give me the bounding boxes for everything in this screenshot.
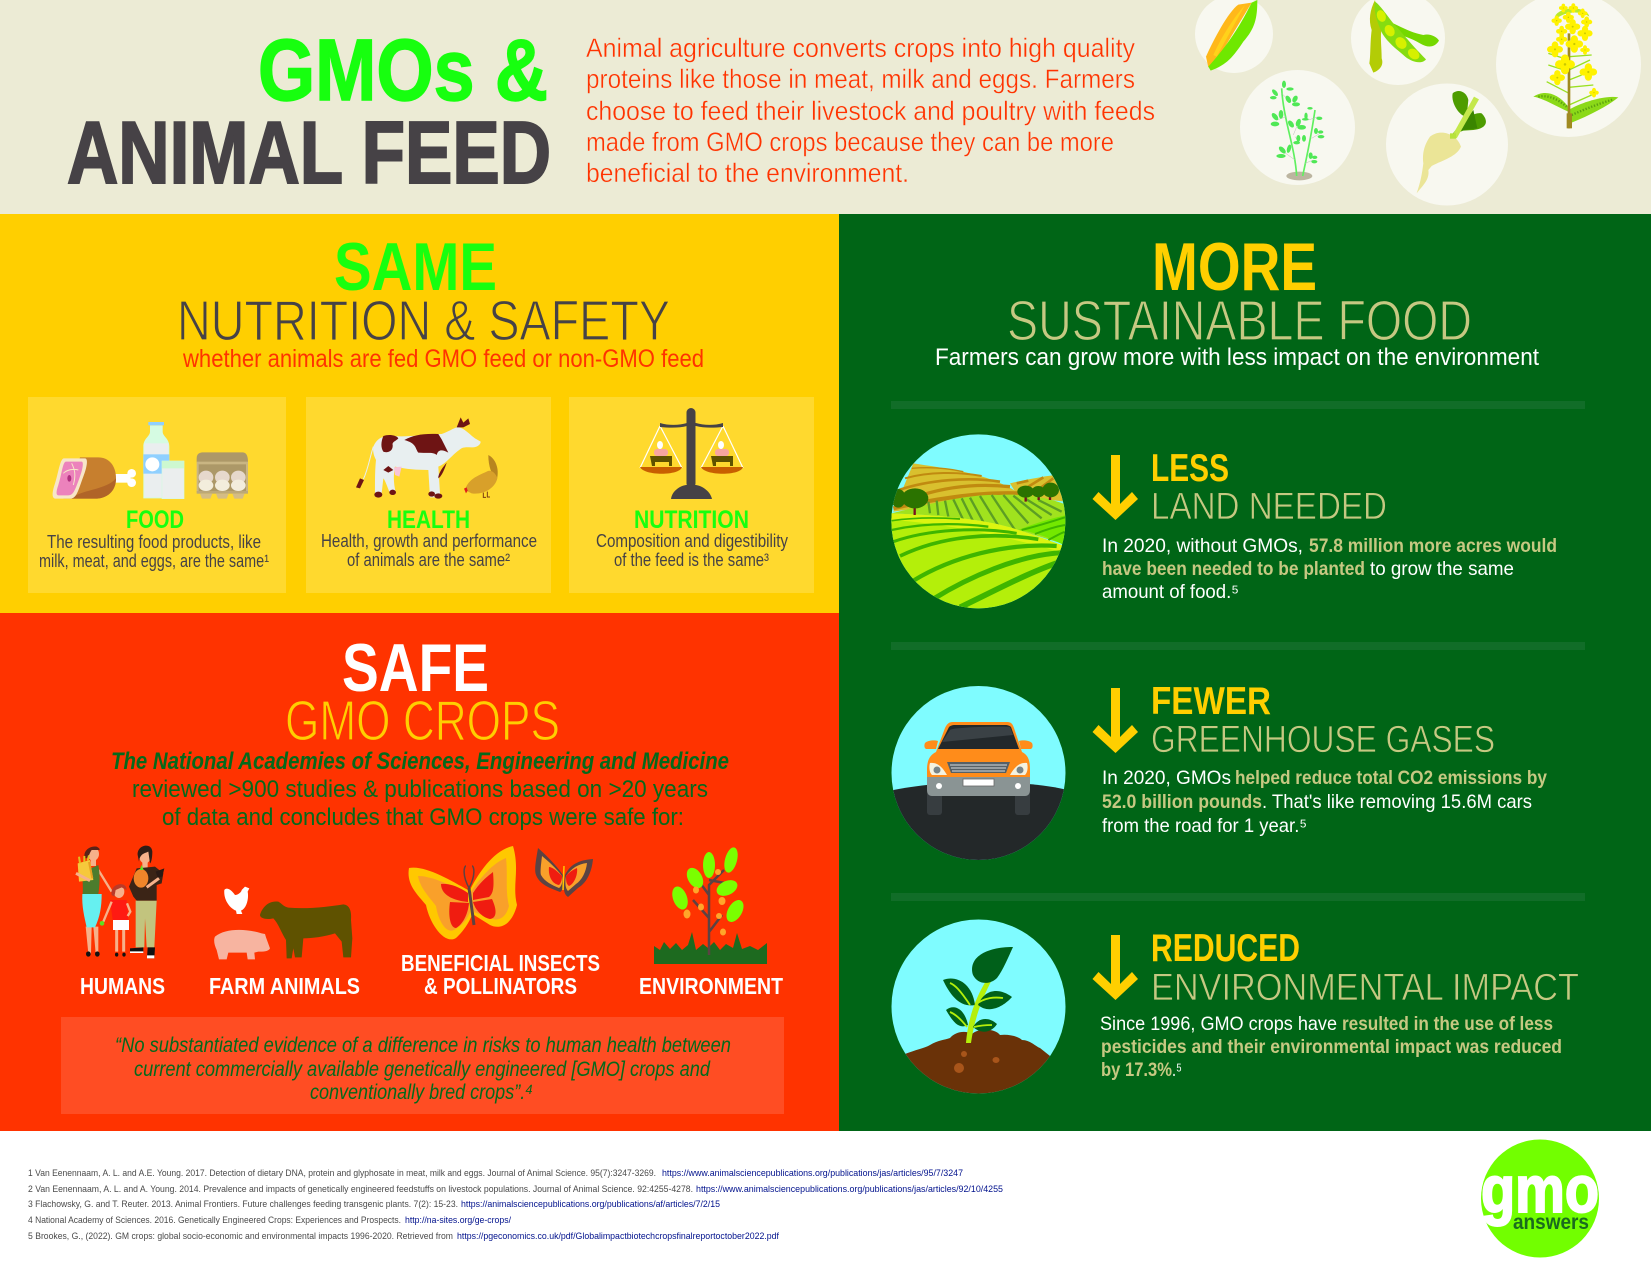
logo: gmo answers: gmo (1481, 1152, 1599, 1226)
text block: resulted in the use of less (1342, 1013, 1553, 1035)
text block: pesticides and their environmental impact was reduced (1101, 1036, 1562, 1058)
card text: health: HEALTH (387, 506, 470, 534)
card text: health (321, 506, 537, 570)
subheading: whether animals are fed GMO feed or non-GMO feed (182, 345, 704, 373)
intro text block: made from GMO crops because they can be more (586, 127, 1114, 157)
text block: national academies: of data and concludes that GMO crops were safe for: (162, 804, 684, 831)
icon: car on road (892, 686, 1066, 860)
heading: reduced environmental impact (1151, 927, 1579, 1009)
callout: quote: conventionally bred crops”.⁴ (310, 1081, 533, 1104)
icon: butterflies (409, 846, 593, 939)
text block: helped reduce total CO2 emissions by (1235, 767, 1547, 789)
intro text block (586, 33, 1155, 188)
icon: canola (1533, 3, 1618, 128)
text block: from the road for 1 year.⁵ (1102, 815, 1307, 837)
card text: nutrition: NUTRITION (634, 506, 749, 534)
icon: egg carton (197, 452, 248, 499)
label: beneficial insects and pollinators (401, 950, 600, 999)
heading: safe (285, 630, 560, 753)
card text: food: FOOD (126, 506, 184, 534)
text block: . That's like removing 15.6M cars (1262, 791, 1532, 813)
card text: health: of animals are the same² (347, 550, 510, 570)
text block: by 17.3% (1101, 1059, 1172, 1081)
callout: quote: “No substantiated evidence of a difference in risks to human health between (115, 1034, 731, 1057)
footnotes: https://animalsciencepublications.org/publications/af/articles/7/2/15 (461, 1199, 720, 1210)
icon: alfalfa (1270, 81, 1324, 180)
footnotes: https://www.animalsciencepublications.org/publications/jas/articles/92/10/4255 (696, 1184, 1003, 1195)
callout: quote: current commercially available genetically engineered [GMO] crops and (134, 1058, 711, 1081)
card: nutrition (569, 397, 814, 593)
footnotes: https://pgeconomics.co.uk/pdf/Globalimpactbiotechcropsfinalreportoctober2022.pdf (457, 1231, 779, 1242)
footnotes (28, 1168, 1003, 1242)
panel: safe GMO crops (0, 613, 839, 1131)
title: GMOs & (258, 22, 548, 119)
crop illustrations (1195, 0, 1641, 206)
footnotes: https://www.animalsciencepublications.org/publications/jas/articles/95/7/3247 (662, 1168, 963, 1179)
section: fewer greenhouse gases (885, 680, 1547, 870)
icon: large butterfly (409, 846, 517, 939)
icon: small butterfly (535, 848, 593, 897)
intro text block: beneficial to the environment. (586, 158, 909, 188)
icon: down arrow (1092, 935, 1138, 1000)
icon: milk bottle and glass (143, 422, 184, 499)
label: environment: ENVIRONMENT (639, 973, 783, 999)
heading: more: MORE (1152, 229, 1317, 305)
section: less land needed (890, 434, 1557, 610)
icon: farm fields (890, 434, 1067, 610)
heading: safe: GMO CROPS (285, 689, 560, 753)
heading: less land needed: LESS (1151, 447, 1229, 490)
intro text block: choose to feed their livestock and poultry with feeds (586, 96, 1155, 126)
icon: cow (356, 417, 481, 499)
icon: down arrow (1092, 455, 1138, 520)
icon: chicken (464, 455, 498, 497)
text block: have been needed to be planted (1102, 558, 1365, 580)
text block (1102, 767, 1547, 837)
footnotes: 2 Van Eenennaam, A. L. and A. Young. 2014. Prevalence and impacts of genetically engineered feedstuffs on livestock populations. Journal of Animal Science. 92:4255-4278. (28, 1184, 693, 1195)
card: food (28, 397, 286, 593)
footnotes: http://na-sites.org/ge-crops/ (405, 1215, 511, 1226)
icon: balance scale (640, 408, 743, 499)
heading: reduced environmental impact: REDUCED (1151, 927, 1300, 970)
text block: .⁵ (1172, 1059, 1182, 1081)
label: beneficial insects and pollinators: BENEFICIAL INSECTS (401, 950, 600, 976)
text block: In 2020, without GMOs, (1102, 535, 1303, 557)
heading: more (1007, 229, 1472, 353)
icon: environment tree (654, 846, 767, 964)
card text: nutrition: Composition and digestibility (596, 531, 788, 551)
footnotes: 4 National Academy of Sciences. 2016. Genetically Engineered Crops: Experiences and Prospects. (28, 1215, 401, 1226)
panel: same nutrition and safety (0, 214, 839, 613)
card text: nutrition: of the feed is the same³ (614, 550, 769, 570)
callout: quote (61, 1017, 784, 1114)
text block: 52.0 billion pounds (1102, 791, 1262, 813)
card text: health: Health, growth and performance (321, 531, 537, 551)
text block: Since 1996, GMO crops have (1100, 1013, 1337, 1035)
intro text block: proteins like those in meat, milk and eggs. Farmers (586, 64, 1135, 94)
panel: more sustainable food (839, 214, 1651, 1131)
logo: gmo answers: answers (1513, 1211, 1589, 1234)
label: humans: HUMANS (80, 973, 165, 999)
heading: fewer greenhouse gases: FEWER (1151, 680, 1271, 723)
footnotes: 1 Van Eenennaam, A. L. and A.E. Young. 2017. Detection of dietary DNA, protein and glyphosate in meat, milk and eggs. Journal of Animal Science. 95(7):3247-3269. (28, 1168, 656, 1179)
footnotes: 3 Flachowsky, G. and T. Reuter. 2013. Animal Frontiers. Future challenges feeding transgenic plants. 7(2): 15-23. (28, 1199, 458, 1210)
text block: In 2020, GMOs (1102, 767, 1231, 789)
card text: food (39, 506, 269, 571)
icon: sugar beet (1417, 91, 1486, 193)
text block: amount of food.⁵ (1102, 581, 1239, 603)
icon: corn (1206, 0, 1257, 71)
heading: same: SAME (334, 229, 497, 305)
label: beneficial insects and pollinators: & POLLINATORS (424, 973, 577, 999)
card: health (306, 397, 551, 593)
icon: soybean (1369, 0, 1439, 73)
icon: seedling in soil (892, 920, 1066, 1100)
text block (1100, 1013, 1562, 1081)
text block (1102, 535, 1557, 603)
text block: national academies (111, 748, 729, 831)
heading: same: NUTRITION & SAFETY (177, 289, 670, 353)
heading: safe: SAFE (342, 630, 489, 706)
icon: farm animals (214, 887, 352, 959)
title: ANIMAL FEED (67, 103, 551, 202)
heading: reduced environmental impact: ENVIRONMENTAL IMPACT (1151, 967, 1579, 1009)
heading: more: SUSTAINABLE FOOD (1007, 289, 1472, 353)
heading: fewer greenhouse gases (1151, 680, 1495, 761)
card text: food: milk, meat, and eggs, are the same¹ (39, 551, 269, 571)
text block: national academies: reviewed >900 studies & publications based on >20 years (132, 776, 708, 803)
card text: nutrition (596, 506, 788, 570)
logo: gmo answers (1481, 1140, 1599, 1258)
heading: less land needed: LAND NEEDED (1151, 486, 1387, 528)
intro text block: Animal agriculture converts crops into high quality (586, 33, 1135, 63)
icon: meat (53, 457, 136, 499)
text block: national academies: The National Academies of Sciences, Engineering and Medicine (111, 748, 729, 775)
header panel (0, 0, 1651, 214)
text block: to grow the same (1370, 558, 1514, 580)
section: reduced environmental impact (892, 920, 1579, 1100)
footnotes: 5 Brookes, G., (2022). GM crops: global socio-economic and environmental impacts 1996-2020. Retrieved from (28, 1231, 453, 1242)
label: farm animals: FARM ANIMALS (209, 973, 360, 999)
heading: same (177, 229, 670, 353)
card text: food: The resulting food products, like (47, 532, 261, 552)
icon: humans (76, 846, 164, 958)
text block: 57.8 million more acres would (1309, 535, 1557, 557)
heading: fewer greenhouse gases: GREENHOUSE GASES (1151, 719, 1495, 761)
title (67, 22, 551, 202)
subheading: Farmers can grow more with less impact on the environment (935, 344, 1539, 371)
heading: less land needed (1151, 447, 1387, 528)
icon: down arrow (1092, 688, 1138, 753)
